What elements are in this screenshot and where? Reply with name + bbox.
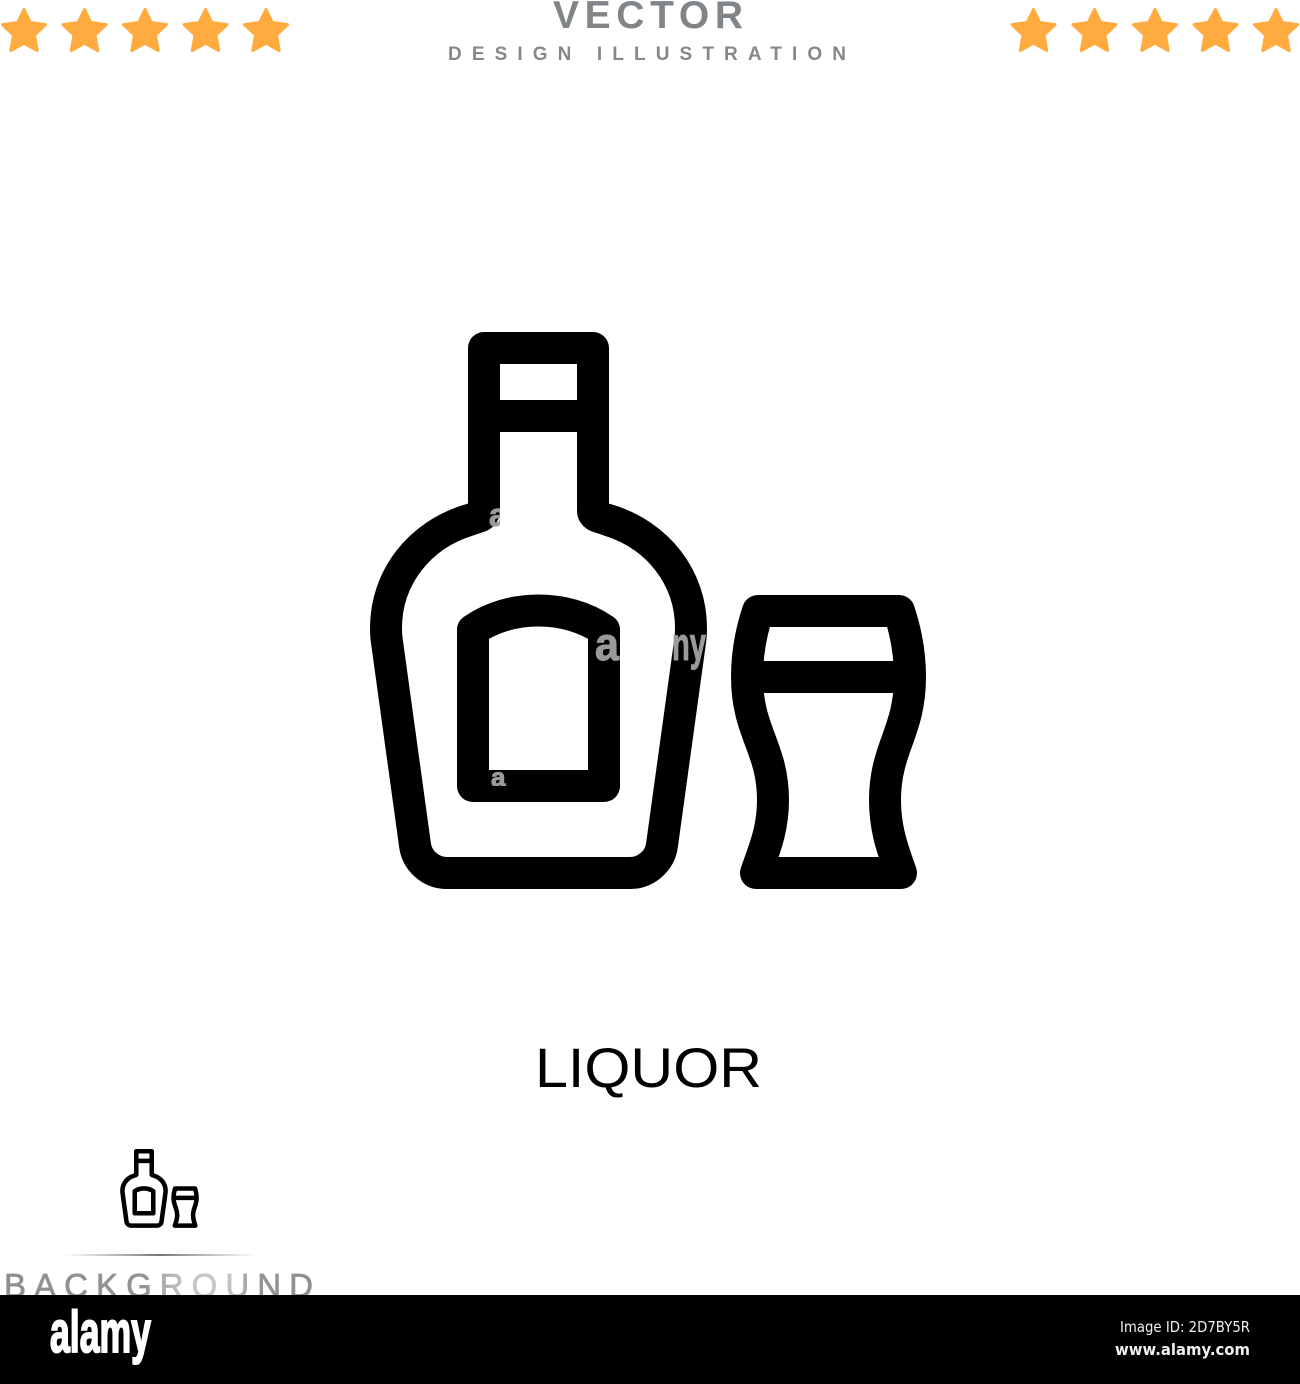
watermark fragments on icon: a xyxy=(595,618,619,670)
image id: Image ID: 2D7BY5R xyxy=(1120,1318,1250,1336)
subheading: DESIGN ILLUSTRATION: DESIGN ILLUSTRATION xyxy=(448,44,846,65)
footer bar xyxy=(0,1295,1300,1384)
icon: beer glass xyxy=(747,611,910,873)
watermark fragments on icon: a xyxy=(489,497,507,533)
label: BACKGROUND: BACKGROUND xyxy=(4,1267,313,1304)
right star rating xyxy=(1012,10,1298,50)
title: LIQUOR: LIQUOR xyxy=(535,1036,762,1099)
website url: www.alamy.com xyxy=(1115,1340,1250,1359)
watermark fragments on icon: ny xyxy=(672,618,706,670)
icon: liquor bottle xyxy=(386,348,691,873)
left star rating xyxy=(2,10,288,50)
watermark fragments on icon xyxy=(489,497,706,792)
watermark fragments on icon: a xyxy=(491,762,506,792)
small icon: bottle and glass xyxy=(122,1151,197,1226)
logo: alamy: alamy xyxy=(50,1300,151,1365)
